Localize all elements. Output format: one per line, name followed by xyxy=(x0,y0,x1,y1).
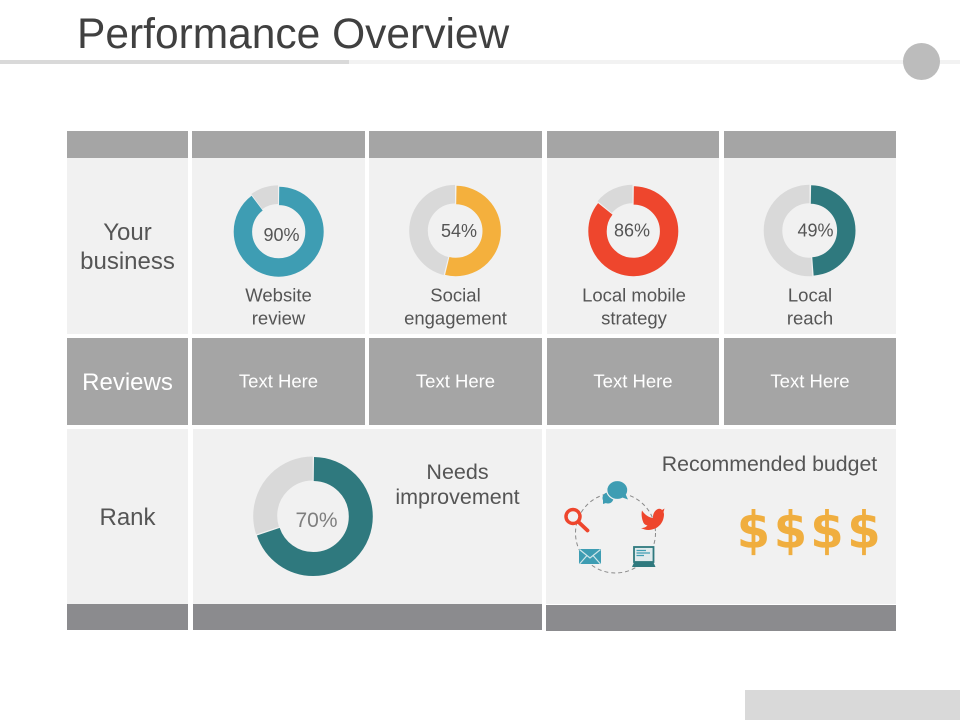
donut: 70% xyxy=(265,468,361,564)
donut: 54% xyxy=(418,194,492,267)
donut: 90% xyxy=(242,195,314,268)
panel: rank label xyxy=(67,429,188,604)
panel: website review: review xyxy=(252,308,306,328)
panel: local reach: reach xyxy=(787,308,833,328)
review cell 3: Text Here xyxy=(593,370,673,392)
panel: reviews label: Reviews xyxy=(82,369,173,396)
panel: your business label: Your xyxy=(103,219,152,246)
panel: recommended budget xyxy=(546,429,896,604)
donut: 49%: 49% xyxy=(797,220,834,240)
panel: needs improvement: Needs xyxy=(426,460,489,484)
donut: 54%: 54% xyxy=(441,221,477,241)
title: Performance Overview xyxy=(77,11,510,58)
icon: dollar signs xyxy=(737,500,881,560)
donut: 49% xyxy=(773,194,846,267)
panel: website review: Website xyxy=(245,284,312,306)
title underline xyxy=(0,60,960,64)
donut: 90%: 90% xyxy=(263,225,300,245)
panel: social engagement: Social xyxy=(430,284,481,306)
review cell 1: Text Here xyxy=(239,370,318,392)
review cell 4 xyxy=(724,338,896,425)
donut: 86%: 86% xyxy=(614,220,650,240)
review cell 4: Text Here xyxy=(770,370,850,392)
icon: dollar signs: $ xyxy=(737,500,770,560)
icon: dollar signs: $ xyxy=(810,500,844,560)
panel: needs improvement: improvement xyxy=(395,485,520,509)
panel: local mobile strategy: strategy xyxy=(601,308,668,328)
icon: chat bubbles xyxy=(602,480,628,504)
review cell 2 xyxy=(369,338,542,425)
panel: social engagement: engagement xyxy=(404,308,507,328)
panel: rank label: Rank xyxy=(99,504,157,531)
panel: your business label: business xyxy=(80,248,175,275)
panel: needs improvement xyxy=(193,429,542,604)
panel: reviews label xyxy=(67,338,188,425)
icon: twitter bird xyxy=(641,508,664,530)
panel: local reach: Local xyxy=(788,284,832,306)
panel: social engagement xyxy=(369,158,542,334)
icon: magnifier xyxy=(566,510,588,530)
panel: local mobile strategy: Local mobile xyxy=(582,284,686,306)
panel: website review xyxy=(192,158,365,334)
review cell 1 xyxy=(192,338,365,425)
review cell 3 xyxy=(547,338,719,425)
review cell 2: Text Here xyxy=(416,370,495,392)
panel: your business label xyxy=(67,158,188,334)
icon cycle: dashed ring xyxy=(576,493,656,573)
donut: 70%: 70% xyxy=(295,509,338,532)
table header row xyxy=(67,131,896,158)
donut: 86% xyxy=(596,194,669,267)
icon: laptop xyxy=(632,547,656,567)
panel: recommended budget: Recommended budget xyxy=(662,452,877,476)
panel: local reach xyxy=(724,158,896,334)
table footer bars xyxy=(67,604,896,631)
decorative circle badge xyxy=(903,43,940,80)
panel: local mobile strategy xyxy=(547,158,719,334)
icon: dollar signs: $ xyxy=(774,500,807,560)
icon: mail envelope xyxy=(579,549,601,564)
bottom right tab xyxy=(745,690,960,720)
icon: dollar signs: $ xyxy=(847,500,881,560)
